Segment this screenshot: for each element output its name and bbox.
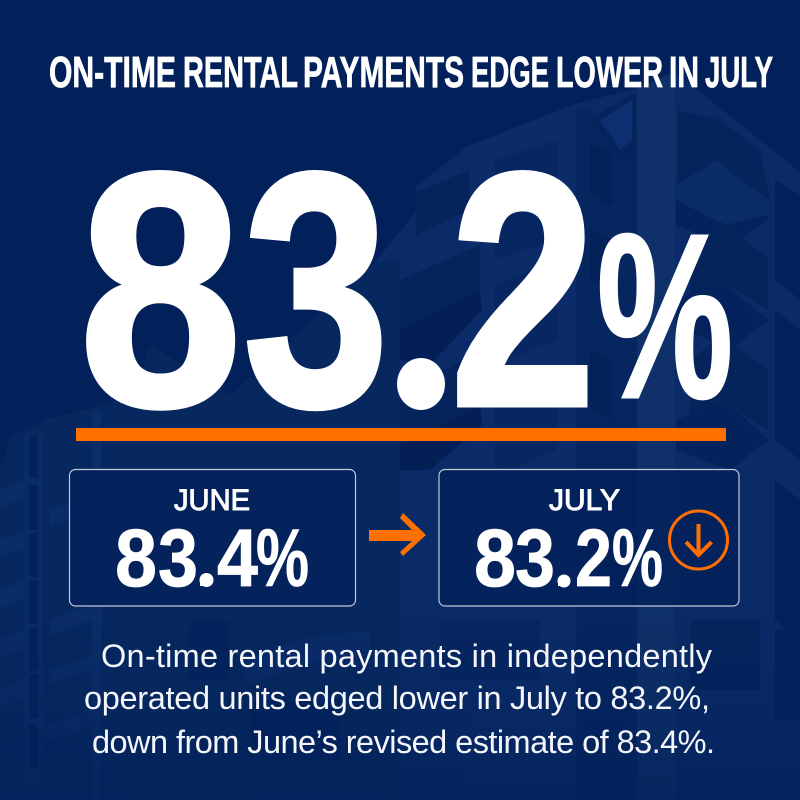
title: PAYMENTS — [303, 48, 464, 97]
orange divider bar — [76, 428, 726, 441]
description text: down from June’s revised estimate of 83.4%. — [92, 724, 715, 760]
June value: 8 — [115, 513, 157, 604]
title: IN — [669, 48, 699, 97]
July value: 2 — [575, 513, 612, 604]
title: LOWER — [556, 48, 663, 97]
title — [49, 48, 773, 97]
title: EDGE — [471, 48, 549, 97]
title: RENTAL — [183, 48, 298, 97]
July value: 8 — [474, 513, 516, 604]
July value: % — [612, 513, 663, 604]
panel: June — [70, 470, 356, 606]
big figure: 83.2%: . — [398, 260, 440, 428]
arrow: June to July — [369, 513, 426, 556]
June value: 4 — [217, 513, 258, 604]
big figure: 83.2%: 8 — [79, 104, 242, 476]
June value: . — [198, 560, 206, 593]
June value: % — [256, 513, 309, 604]
description text — [84, 638, 715, 760]
big figure: 83.2%: % — [597, 185, 733, 447]
big figure: 83.2%: 3 — [243, 104, 389, 476]
July value — [474, 513, 663, 604]
June value — [115, 513, 309, 604]
icon: down arrow in circle — [670, 511, 728, 569]
June label: JUNE — [174, 484, 250, 517]
description text: operated units edged lower in July to 83.2%, — [84, 680, 710, 716]
big figure: 83.2% — [79, 104, 733, 476]
description text: On-time rental payments in independently — [101, 638, 713, 674]
panel: July — [439, 470, 739, 606]
July value: . — [556, 560, 564, 593]
July value: 3 — [515, 513, 555, 604]
June value: 3 — [158, 513, 198, 604]
title: ON-TIME — [49, 48, 176, 97]
July label: JULY — [549, 484, 620, 517]
big figure: 83.2%: 2 — [450, 104, 596, 476]
